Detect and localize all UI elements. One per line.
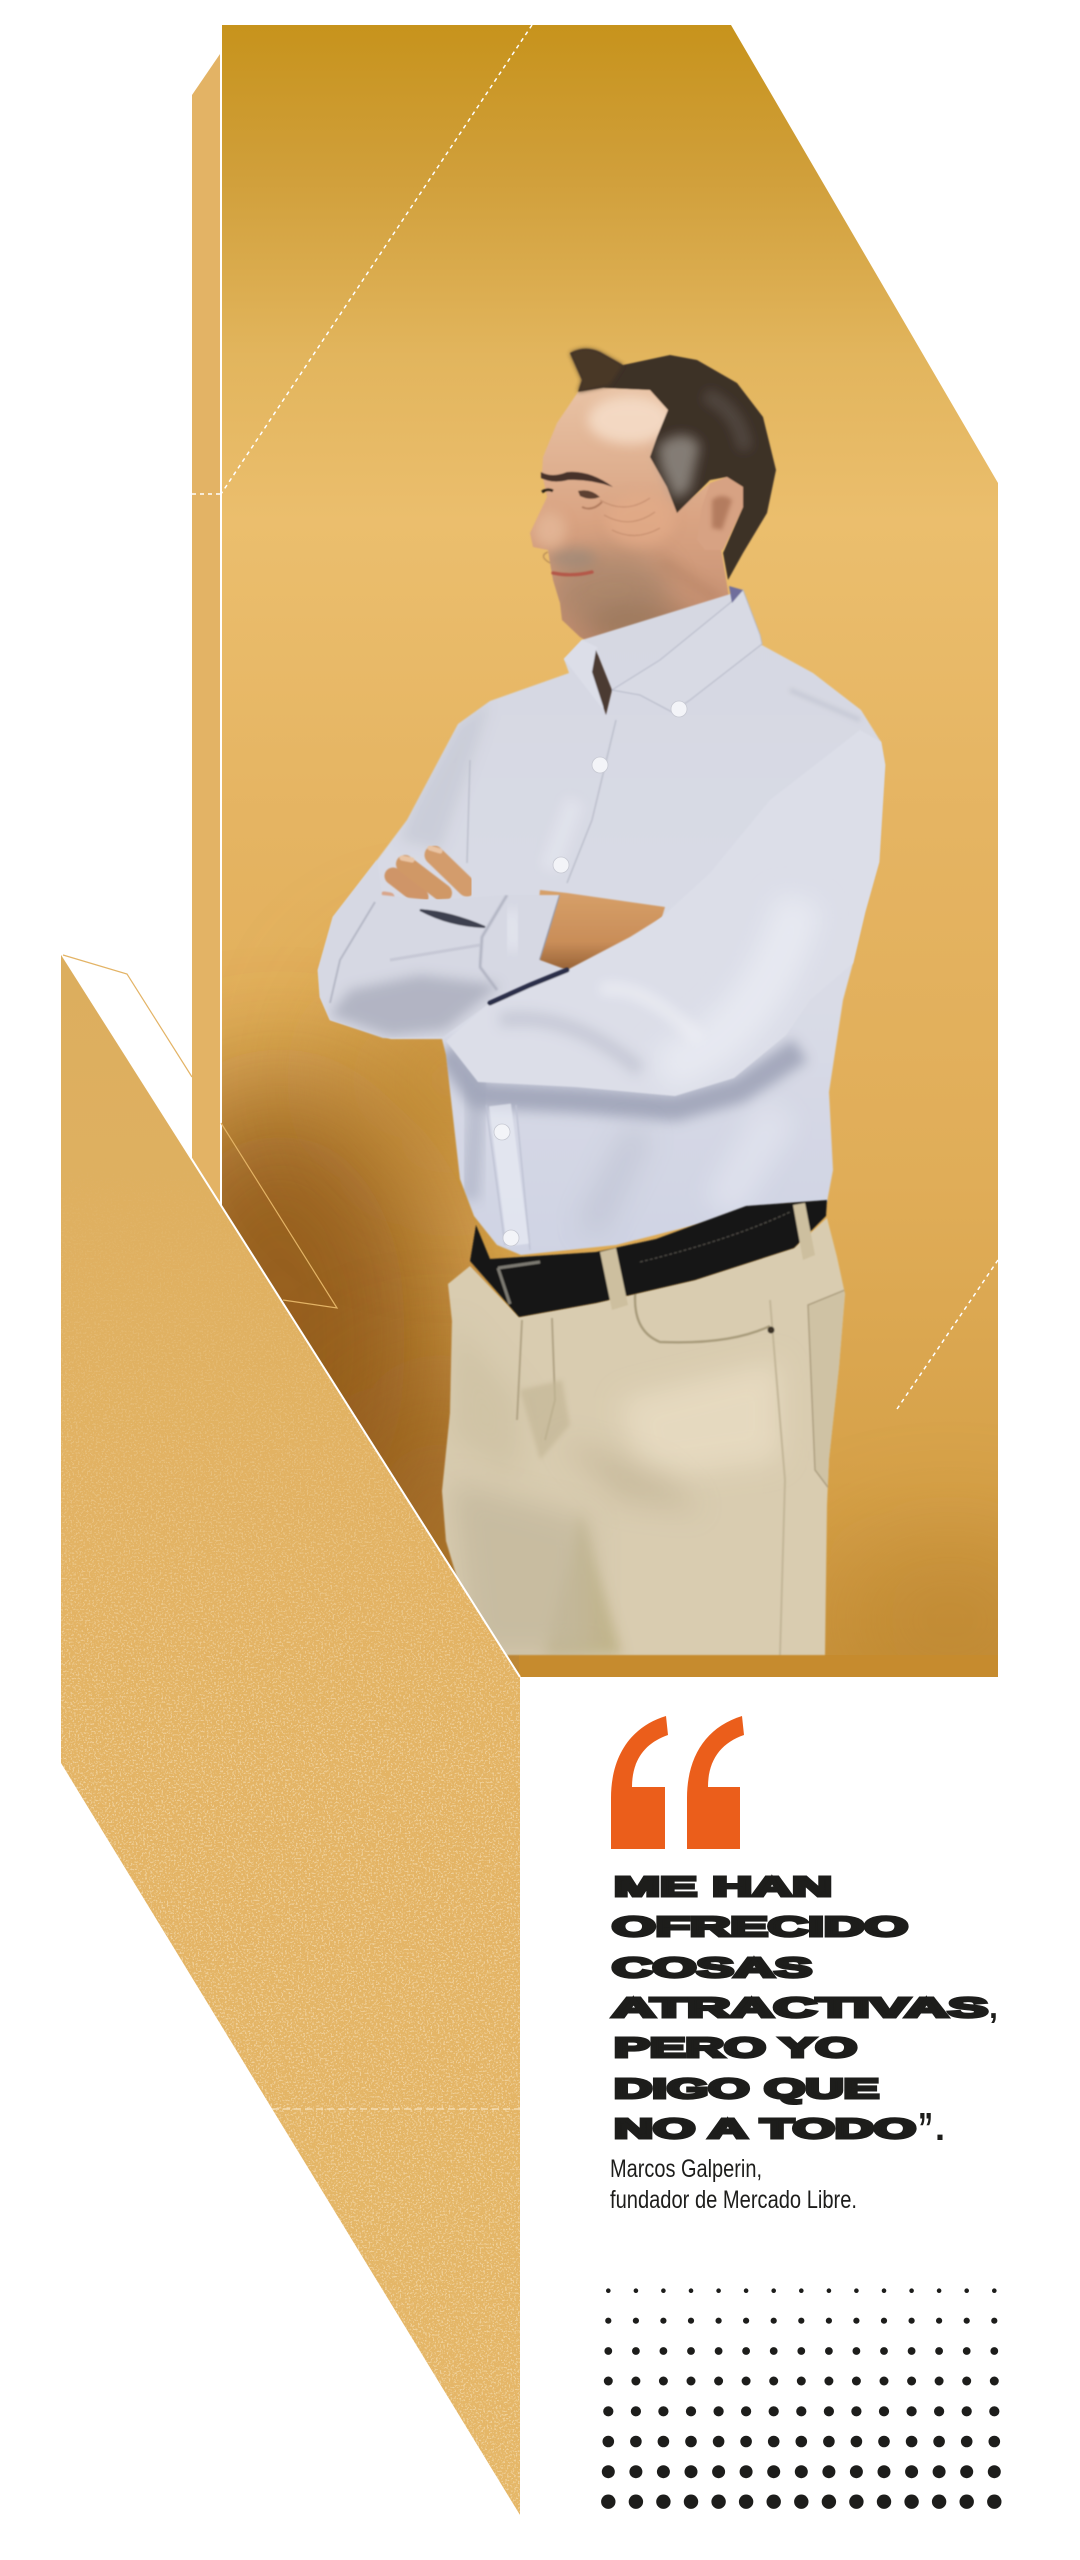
ear (708, 476, 744, 550)
panel: photo background (222, 25, 998, 1677)
quote text: PERO YO (614, 2032, 857, 2063)
quote text (612, 1871, 998, 2153)
thin gold outline around polygon tip (63, 955, 337, 1308)
photo: man with crossed arms (318, 349, 885, 1660)
quote text: NO A TODO (614, 2113, 916, 2144)
quotation mark icon (611, 1716, 744, 1849)
panel: large folded polygon (61, 953, 520, 2515)
shirt torso (318, 591, 885, 1255)
hand fingers (384, 848, 467, 897)
neck and face (530, 349, 776, 672)
quote text: COSAS (612, 1952, 812, 1983)
hair (570, 349, 776, 580)
eyes brows mouth (541, 472, 613, 575)
attribution text: Marcos Galperin, (610, 2155, 762, 2183)
halftone dot grid (601, 2288, 1002, 2509)
panel: left vertical strip (192, 54, 220, 1205)
quote text: ” (918, 2104, 933, 2153)
quote text: , (989, 1989, 998, 2025)
dashed fold lines on photo (192, 25, 998, 1412)
upper sleeve (446, 730, 885, 1096)
belt (470, 1200, 827, 1317)
shirt buttons (494, 701, 687, 1246)
quote text: OFRECIDO (612, 1911, 908, 1942)
attribution text (610, 2155, 857, 2214)
collar (564, 586, 762, 715)
lower sleeve and cuff (318, 860, 567, 1038)
quote text: DIGO QUE (614, 2073, 879, 2104)
quote text: ATRACTIVAS (612, 1992, 988, 2023)
attribution text: fundador de Mercado Libre. (610, 2186, 857, 2214)
trousers (440, 1200, 860, 1660)
quote text: . (935, 2107, 945, 2148)
forearm (538, 889, 666, 970)
quote text: ME HAN (614, 1871, 832, 1902)
